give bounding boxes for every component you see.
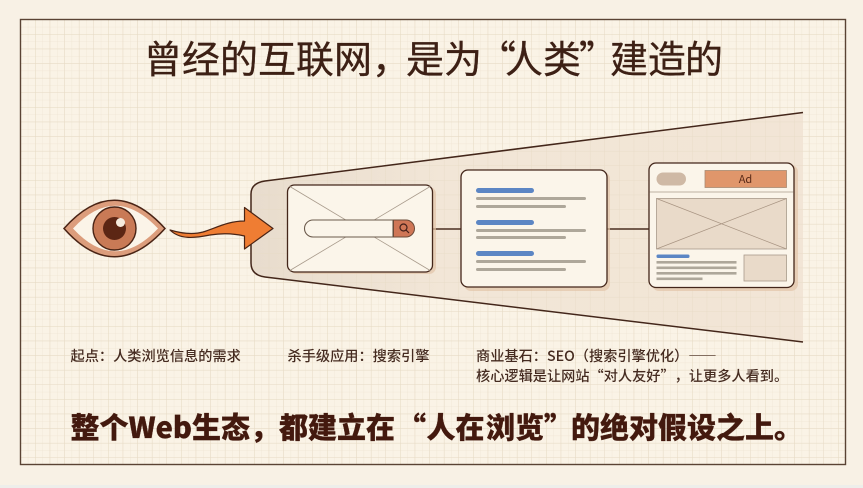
article text lines — [656, 254, 736, 280]
image placeholder — [656, 198, 786, 249]
caption: SEO: 商业基石：SEO（搜索引擎优化）—— — [476, 346, 717, 366]
thumbnail — [744, 255, 786, 281]
panel: search results card — [461, 170, 610, 291]
result 3 — [476, 251, 586, 271]
caption: killer app: 杀手级应用：搜索引擎 — [288, 346, 429, 366]
caption: SEO — [476, 346, 788, 386]
panel: web page with ad — [649, 163, 798, 291]
icon: eye — [64, 200, 165, 257]
ad banner: Ad — [739, 171, 752, 187]
search bar — [304, 220, 414, 237]
panel: expanding view cone — [251, 112, 803, 342]
icon: magnifier — [400, 224, 409, 233]
panel: search engine card — [288, 185, 436, 274]
connector: results to page — [607, 228, 649, 230]
arrow: eye to search — [170, 208, 273, 249]
conclusion: 整个Web生态，都建立在 — [70, 405, 395, 447]
result 2 — [476, 220, 586, 239]
conclusion: “人在浏览” — [397, 405, 573, 447]
ad banner — [705, 170, 786, 188]
connector: search to results — [433, 228, 461, 230]
caption: starting point: 起点：人类浏览信息的需求 — [70, 346, 241, 366]
conclusion: 的绝对假设之上。 — [571, 405, 803, 447]
caption: SEO: 核心逻辑是让网站“对人友好”，让更多人看到。 — [476, 366, 788, 386]
title: 曾经的互联网，是为“人类”建造的 — [144, 29, 723, 84]
result 1 — [476, 188, 586, 208]
logo pill — [656, 172, 686, 186]
